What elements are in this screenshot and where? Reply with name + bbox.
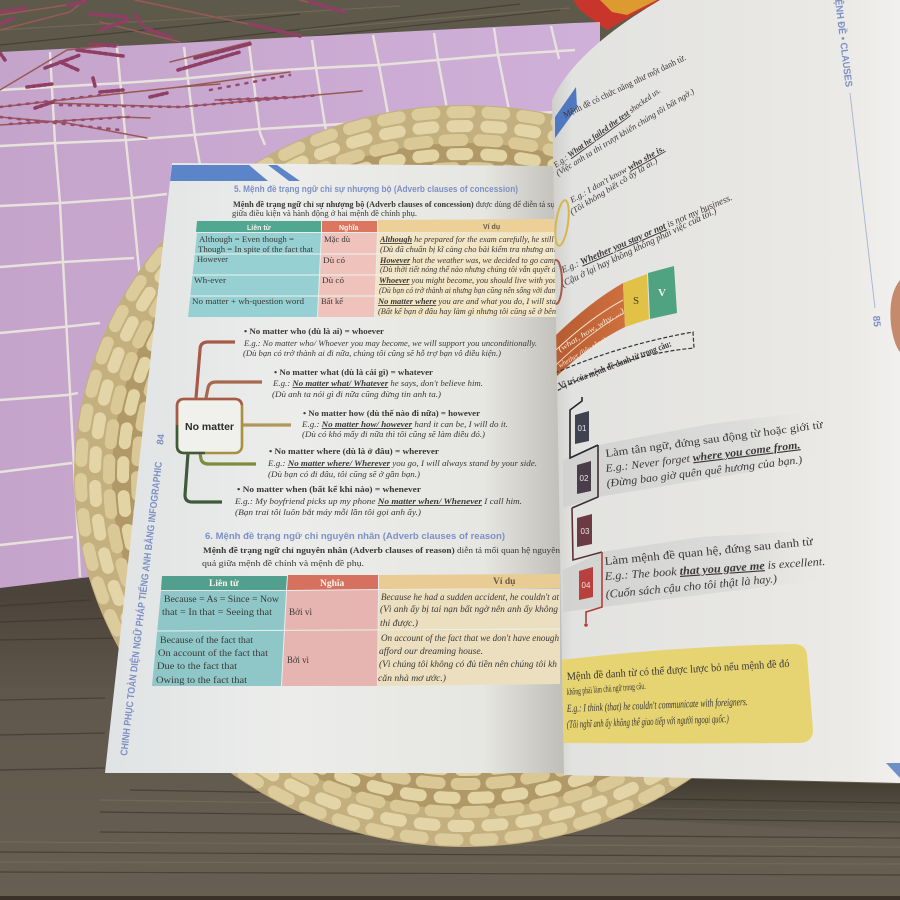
section 6 heading: 6. Mệnh đề trạng ngữ chỉ nguyên nhân (Adverb clauses of reason) [205,531,505,542]
subject examples: (Cậu ở lại hay không không phải việc của tôi.) [560,206,718,290]
section 6 intro: quả giữa mệnh đề chính và mệnh đề phụ. [202,558,364,568]
list item 02: object: Làm tân ngữ, đứng sau động từ hoặc giới từ [605,419,825,460]
list item 02: object: E.g.: Never forget where you come from. [604,439,801,475]
number badge 01: 01 [578,424,587,433]
mind map text: E.g.: No matter where/ Wherever you go, I will always stand by your side. [267,459,537,468]
purple tiled mat [0,22,600,588]
table: reason conjunctions [152,574,560,686]
connector frame line [570,397,602,627]
formula bar: wh-word, S, V: S [633,295,639,307]
yellow note box: E.g.: I think (that) he couldn't communicate with foreigners. [566,696,748,715]
mind map text: • No matter who (dù là ai) = whoever [244,327,384,336]
table: reason conjunctions: thi được.) [380,618,418,628]
mind map text: (Dù bạn có đi đâu, tôi cũng sẽ ở gần bạn.) [268,470,420,479]
mind map branches [185,342,291,502]
table: reason conjunctions: afford our dreaming house. [379,646,483,656]
table: concession conjunctions: Wh-ever [194,275,226,285]
table: concession conjunctions: Bất kể [321,296,343,306]
list item 02: object: (Đừng bao giờ quên quê hương của bạn.) [606,454,803,490]
mind map text: • No matter where (dù là ở đâu) = wherever [269,447,439,456]
list item 04: relative clause: (Cuốn sách cậu cho tôi thật là hay.) [605,572,778,601]
subject examples: Mệnh đề có chức năng như một danh từ. [562,52,688,120]
table: reason conjunctions: Because = As = Since = Now [164,594,279,605]
table: concession conjunctions: Dù có [323,255,345,265]
mind map text: (Dù có khó mấy đi nữa thì tôi cũng sẽ làm điều đó.) [302,430,485,439]
table: concession conjunctions: Whoever you might become, you should live with you [379,276,557,285]
table: reason conjunctions: (Vì chúng tôi không có đủ tiền nên chúng tôi kh [379,659,557,669]
table: reason conjunctions: Bởi vì [289,607,312,618]
yellow note box: (Tôi nghĩ anh ấy không thể giao tiếp với người ngoại quốc.) [567,713,729,731]
table: reason conjunctions: căn nhà mơ ước.) [378,673,446,683]
grey list bands [564,418,760,612]
table: concession conjunctions: Dù có [322,275,344,285]
table: concession conjunctions: No matter where you are and what you do, I will sta [377,297,556,306]
mind map text: • No matter what (dù là cái gì) = whatever [274,368,433,377]
table: concession conjunctions: Although = Even though = [199,234,294,244]
subject examples: (Tôi không biết cô ấy là ai.) [568,155,659,217]
mind map: No matter [177,327,537,517]
mind map text: E.g.: No matter who/ Whoever you may become, we will support you unconditionally. [243,339,537,348]
table: reason conjunctions: Liên từ [209,579,239,589]
number badge 02 [577,461,591,494]
left page corner ribbons [170,165,300,181]
table: concession conjunctions: Liên từ [247,225,272,232]
subject examples: (Việc anh ta thi trượt khiến chúng tôi bất ngờ.) [554,86,696,178]
table: reason conjunctions: Ví dụ [493,577,516,587]
table: reason conjunctions: Due to the fact that [157,661,237,672]
table: concession conjunctions: Ví dụ [483,224,500,231]
table: concession conjunctions: (Bất kể bạn ở đâu hay làm gì nhưng tôi cũng sẽ ở bên [378,307,556,316]
number badge 03: 03 [581,527,590,536]
section 6 intro [202,545,561,568]
mind map text: E.g.: No matter what/ Whatever he says, don't believe him. [272,379,483,388]
blue corner triangle [886,763,900,778]
table: reason conjunctions: On account of the fact that we don't have enough [381,633,559,643]
table: concession conjunctions: Though = In spite of the fact that [198,244,314,254]
table: reason conjunctions: Because he had a sudden accident, he couldn't at [381,592,559,602]
list item 04: relative clause: E.g.: The book that you gave me is excellent. [603,556,826,583]
subject examples: E.g.: I don't know who she is. [567,143,666,205]
table: concession conjunctions: (Dù đã chuẩn bị kĩ càng cho bài kiểm tra nhưng anh [380,245,558,254]
mind map text: E.g.: No matter how/ however hard it can be, I will do it. [301,420,508,429]
number badge 04 [579,567,593,600]
left book page (84) [105,163,566,773]
mind map text [234,327,537,517]
table: reason conjunctions: On account of the fact that [158,648,268,659]
blue corner tab [555,87,577,138]
list item 02: object [604,419,825,490]
list item 04: relative clause: Làm mệnh đề quan hệ, đứng sau danh từ [604,535,814,568]
red and orange box at the top [573,0,660,30]
mind map text: E.g.: My boyfriend picks up my phone No matter when/ Whenever I call him. [234,497,522,506]
spine title: CHINH PHỤC TOÀN DIỆN NGỮ PHÁP TIẾNG ANH BẰNG INFOGRAPHIC [117,461,165,756]
number badge 03 [577,514,592,547]
formula bar: wh-word, S, V: whether (liệu rằng) [556,335,608,370]
page number 84: 84 [155,433,167,445]
table: concession conjunctions: No matter + wh-question word [192,296,305,306]
table: concession conjunctions: However hot the weather was, we decided to go camp [379,256,558,265]
table: reason conjunctions: Nghĩa [320,579,345,589]
formula bar: wh-word, S, V: (what, how, why, ...) [556,305,626,354]
mind map text: • No matter when (bất kể khi nào) = whenever [237,485,421,494]
table: concession conjunctions: Mặc dù [324,234,351,244]
yellow ring icon [554,199,570,247]
table: concession conjunctions: Nghĩa [339,225,359,232]
right book page (85) [550,0,900,783]
mind map text: (Dù anh ta nói gì đi nữa cũng đừng tin anh ta.) [272,390,441,399]
yellow note box: không phải làm chủ ngữ trong câu. [566,682,646,698]
red ring icon [554,259,563,305]
mind map text: (Bạn trai tôi luôn bắt máy mỗi lần tôi gọi anh ấy.) [235,508,421,517]
number badge 04: 04 [582,581,591,590]
central box [177,399,242,453]
dashed heading: noun clause position: Vị trí của mệnh đề danh từ trong câu: [557,339,673,392]
table: reason conjunctions: Bởi vì [287,655,309,666]
section 6 intro: Mệnh đề trạng ngữ chỉ nguyên nhân (Adverb clauses of reason) diễn tả mối quan hệ nguyên [203,545,561,555]
formula bar: wh-word, S, V [555,266,677,378]
yellow note box: Mệnh đề danh từ có thể được lược bỏ nếu mệnh đề đó [566,658,790,683]
table: reason conjunctions: Owing to the fact that [156,675,247,686]
list item 04: relative clause [603,535,826,601]
number badge 02: 02 [580,474,589,483]
mind map text: • No matter how (dù thế nào đi nữa) = however [303,409,480,418]
subject examples [551,52,734,290]
round woven straw placemat [81,112,849,840]
table: concession conjunctions: (Dù thời tiết nóng thế nào nhưng chúng tôi vẫn quyết đi [380,265,558,274]
section 5 intro [232,200,556,218]
central box: No matter [185,421,234,433]
mind map text: (Dù bạn có trở thành ai đi nữa, chúng tôi cũng sẽ hỗ trợ bạn vô điều kiện.) [243,349,501,358]
dried purple plant sprigs [0,0,362,138]
finger at the right edge [890,280,900,352]
yellow note box [560,644,813,744]
table: concession conjunctions: Although he prepared for the exam carefully, he still f [379,235,560,244]
page number 85: 85 [870,315,882,328]
number badge 01 [575,411,589,444]
subject examples: E.g.: Whether you stay or not is not my business. [559,193,734,276]
table: reason conjunctions: that = In that = Seeing that [162,607,272,618]
section 5 intro: Mệnh đề trạng ngữ chỉ sự nhượng bộ (Adverb clauses of concession) được dùng để diễn tả sự [233,200,556,209]
table: reason conjunctions: Because of the fact that [160,635,253,646]
formula bar: wh-word, S, V: V [658,287,666,299]
table: concession conjunctions: However [197,254,228,264]
table: concession conjunctions [188,219,560,317]
table: reason conjunctions: (Vì anh ấy bị tai nạn bất ngờ nên anh ấy không [380,604,558,614]
section 5 intro: giữa điều kiện và hành động ở hai mệnh đề chính phụ. [232,209,417,218]
table: concession conjunctions: (Dù bạn có trở thành ai nhưng bạn cũng nên sống với đam [379,286,557,295]
section 5 heading: 5. Mệnh đề trạng ngữ chỉ sự nhượng bộ (Adverb clauses of concession) [234,184,518,194]
subject examples: E.g.: What he failed the test shocked us. [551,85,662,170]
